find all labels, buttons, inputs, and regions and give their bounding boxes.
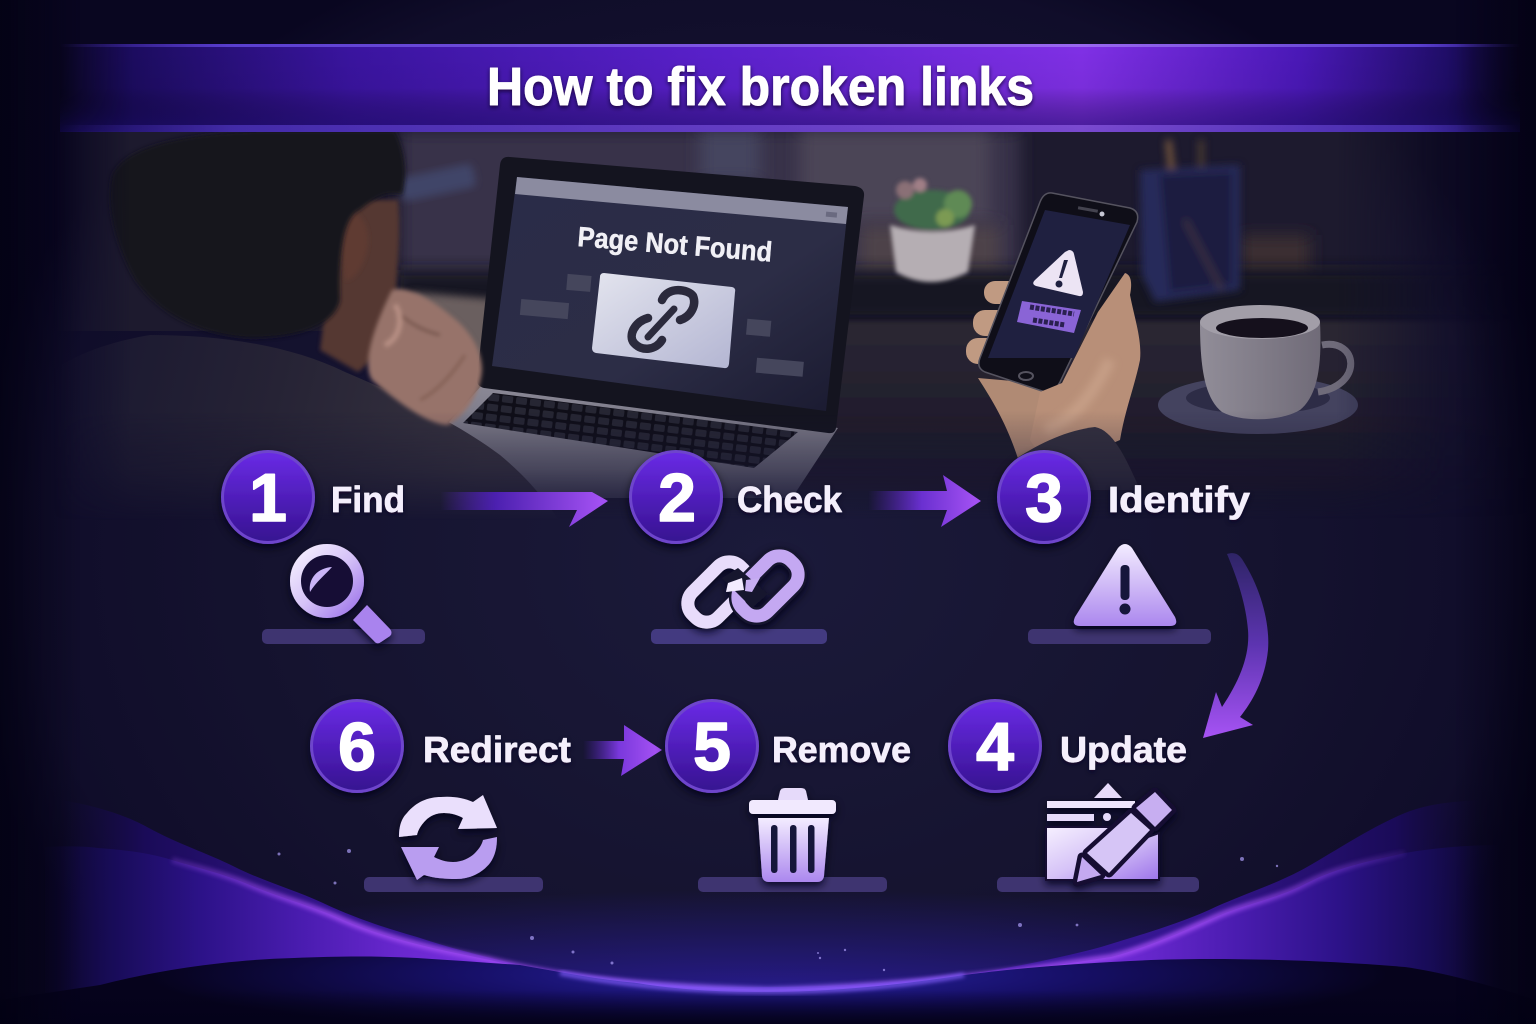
phone screen (988, 210, 1130, 358)
icon: document with pencil (1046, 783, 1172, 882)
arrow: step 2 to 3 (868, 475, 981, 527)
desk near hand highlight (410, 288, 486, 395)
step 5: Remove (666, 700, 911, 892)
label Find: Find (331, 479, 405, 520)
person: sweater (0, 335, 565, 530)
icon: warning triangle (1074, 544, 1176, 626)
sleeve (1010, 427, 1140, 490)
step 6: Redirect (312, 700, 571, 892)
screen text: Page Not Found (577, 221, 773, 268)
coffee cup on saucer (1158, 305, 1358, 434)
step 4: Update (950, 700, 1199, 892)
shelf bar (997, 877, 1199, 892)
number badge 3: 3 (1025, 460, 1063, 536)
phone and holding hand (966, 193, 1140, 490)
fingers behind phone (966, 281, 1009, 364)
arrow: step 6 to 5 (583, 725, 662, 776)
number badge 4: 4 (976, 709, 1014, 785)
laptop lid and screen (477, 157, 864, 433)
number badge 3 (998, 452, 1090, 542)
number badge 5: 5 (693, 709, 731, 785)
step 3: Identify (998, 452, 1250, 644)
shelf bar (1028, 629, 1211, 644)
pen holder (1140, 140, 1240, 302)
shelf bar (651, 629, 827, 644)
arrow: step 1 to 2 (440, 492, 608, 527)
number badge 6 (312, 700, 402, 792)
palm behind phone lower edge (978, 378, 1041, 458)
palm and thumb (1041, 273, 1140, 442)
address bar (515, 177, 848, 224)
title: How to fix broken links (487, 57, 1034, 117)
label Redirect: Redirect (423, 729, 571, 770)
label Check: Check (737, 479, 843, 520)
title banner (60, 44, 1520, 132)
phone warning button with garbled marks (1017, 301, 1081, 333)
number badge 1 (222, 452, 314, 542)
bottom wave decoration (0, 800, 1536, 1024)
person: neck and face (320, 200, 399, 372)
step 2: Check (630, 452, 843, 644)
shelf bar (262, 629, 425, 644)
number badge 6: 6 (338, 709, 376, 785)
shelf bar (364, 877, 543, 892)
person: hand on chin (368, 289, 482, 425)
photo: person at desk with laptop and phone (86, 132, 1424, 498)
number badge 2: 2 (658, 460, 696, 536)
icon: trash can (749, 788, 836, 882)
person: hair (110, 131, 405, 338)
laptop base and keyboard (440, 376, 838, 498)
faint screen boxes (517, 270, 810, 377)
blurred wall and shelf (86, 132, 1413, 331)
arrow: step 3 to 4 curved (1203, 553, 1268, 738)
icon: broken chain link (681, 549, 805, 629)
icon: refresh arrows (399, 795, 497, 880)
label Identify: Identify (1108, 479, 1250, 520)
warning on phone (1033, 250, 1083, 296)
step 1: Find (222, 452, 425, 644)
desk surface (802, 322, 1431, 484)
broken link card (592, 273, 735, 368)
number badge 2 (630, 452, 722, 542)
keyboard (463, 393, 798, 468)
phone body (979, 193, 1138, 392)
phone speaker (1078, 206, 1098, 213)
icon: magnifying glass (296, 550, 392, 643)
number badge 5 (666, 700, 758, 792)
number badge 1: 1 (249, 460, 287, 536)
broken chain glyph (632, 290, 694, 349)
label Remove: Remove (772, 729, 911, 770)
plant (890, 178, 975, 282)
number badge 4 (950, 700, 1040, 792)
label Update: Update (1060, 729, 1187, 770)
shelf bar (698, 877, 887, 892)
stars (278, 849, 1278, 971)
